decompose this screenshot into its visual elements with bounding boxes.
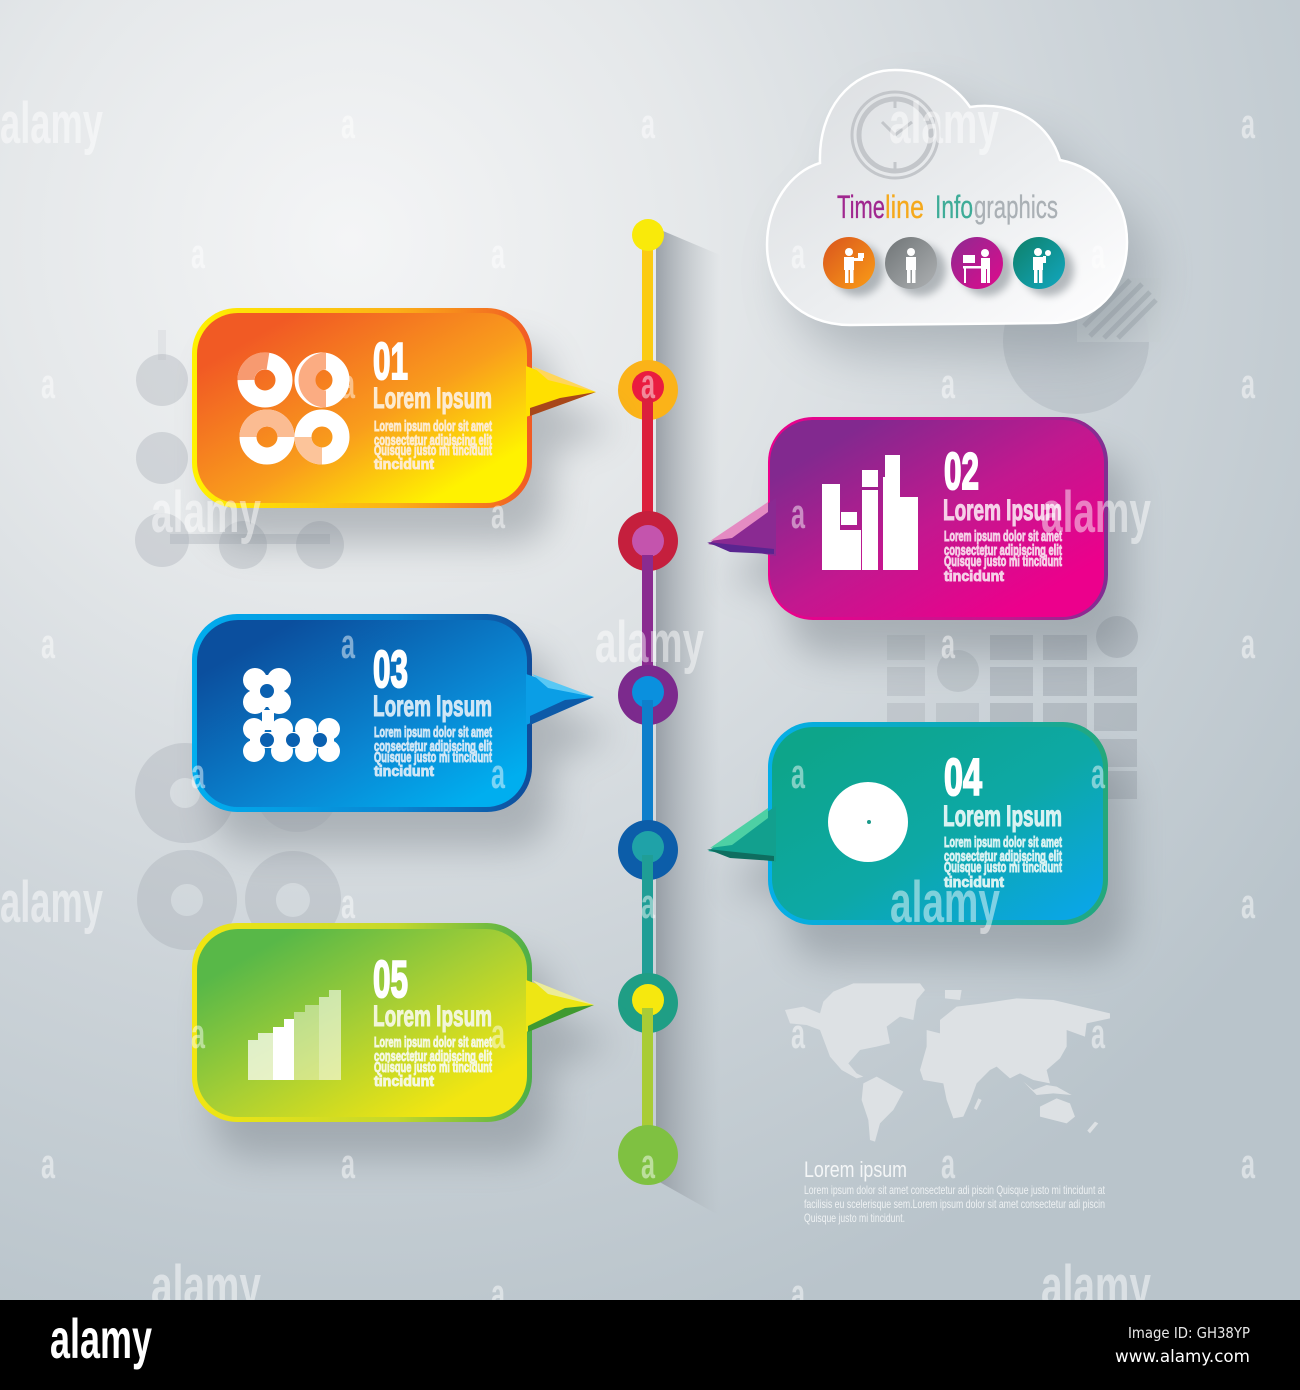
- text block: Quisque justo mi tincidunt: [374, 749, 492, 766]
- node 5: [618, 973, 678, 1034]
- text block: consectetur adipiscing elit: [374, 432, 492, 449]
- footer bar: [0, 1300, 1300, 1390]
- number: 04: [944, 749, 982, 807]
- title: [837, 189, 1058, 225]
- watermarks: a: [491, 230, 505, 277]
- text block: consectetur adipiscing elit: [944, 848, 1062, 865]
- watermarks: a: [341, 620, 355, 667]
- watermarks: a: [791, 750, 805, 797]
- watermarks: a: [791, 230, 805, 277]
- icon: gears: [246, 361, 341, 456]
- watermarks: alamy: [1041, 1254, 1151, 1319]
- watermarks: alamy: [890, 870, 1000, 935]
- text block: Lorem ipsum dolor sit amet: [374, 1034, 492, 1051]
- panel: bubble 03: [192, 614, 614, 848]
- watermarks: a: [491, 750, 505, 797]
- pointer: [707, 806, 776, 862]
- icon: person with tablet: [823, 237, 884, 296]
- text block: [374, 418, 492, 473]
- decorative pie and stripes: [1003, 268, 1161, 414]
- text block: Quisque justo mi tincidunt: [374, 1059, 492, 1076]
- text block: [944, 834, 1062, 891]
- panel: cloud title: [767, 70, 1149, 355]
- watermarks: a: [641, 360, 655, 407]
- text block: Lorem ipsum dolor sit amet: [944, 528, 1062, 545]
- node 3: [618, 665, 678, 726]
- watermarks: a: [491, 1010, 505, 1057]
- caption body: Quisque justo mi tincidunt.: [804, 1211, 905, 1225]
- watermarks: a: [1241, 620, 1255, 667]
- caption heading: Lorem ipsum: [804, 1157, 907, 1182]
- heading: Lorem Ipsum: [373, 690, 492, 723]
- text block: Lorem ipsum dolor sit amet: [374, 724, 492, 741]
- text block: Lorem ipsum dolor sit amet: [374, 418, 492, 435]
- end node: [618, 1125, 678, 1185]
- text block: tincidunt: [374, 456, 434, 473]
- watermarks: alamy: [151, 1254, 261, 1319]
- watermarks: a: [191, 1010, 205, 1057]
- panel: bubble 01: [192, 308, 616, 544]
- text block: Lorem ipsum dolor sit amet: [944, 834, 1062, 851]
- start node: [632, 219, 664, 251]
- icon: person at desk: [951, 237, 1012, 296]
- watermarks: a: [191, 230, 205, 277]
- heading: Lorem Ipsum: [373, 1000, 492, 1033]
- number: 01: [373, 333, 408, 391]
- text block: tincidunt: [944, 874, 1004, 891]
- watermarks: a: [191, 750, 205, 797]
- title: Info: [935, 189, 973, 225]
- caption body: facilisis eu scelerisque sem.Lorem ipsum dolor sit amet consectetur adi piscin: [804, 1197, 1105, 1211]
- watermarks: a: [491, 1270, 505, 1317]
- watermarks: a: [641, 100, 655, 147]
- heading: Lorem Ipsum: [943, 800, 1062, 833]
- footer logo: alamy: [50, 1307, 152, 1370]
- watermarks: a: [641, 880, 655, 927]
- watermarks: a: [1241, 880, 1255, 927]
- text block: tincidunt: [944, 568, 1004, 585]
- icon: rising bars: [248, 990, 341, 1080]
- watermarks: a: [791, 490, 805, 537]
- text block: tincidunt: [374, 1073, 434, 1090]
- website: www.alamy.com: [1115, 1347, 1250, 1367]
- icon: person with bulb: [1013, 237, 1074, 296]
- decorative grey gears left: [135, 330, 344, 950]
- number: 02: [944, 443, 979, 501]
- text block: Quisque justo mi tincidunt: [944, 553, 1062, 570]
- icon: gears: [243, 668, 340, 762]
- text block: [944, 528, 1062, 585]
- watermarks: alamy: [595, 610, 704, 675]
- panel: bubble 02: [707, 417, 1128, 656]
- text block: consectetur adipiscing elit: [374, 1048, 492, 1065]
- watermarks: a: [1241, 100, 1255, 147]
- heading: Lorem Ipsum: [373, 382, 492, 415]
- caption: [804, 1157, 1105, 1225]
- heading: Lorem Ipsum: [943, 494, 1062, 527]
- text block: Quisque justo mi tincidunt: [374, 442, 492, 459]
- node 2: [618, 511, 678, 575]
- watermarks: a: [41, 360, 55, 407]
- watermarks: alamy: [0, 870, 103, 935]
- pointer: [526, 980, 594, 1032]
- pointer: [526, 366, 596, 417]
- watermarks: a: [1091, 750, 1105, 797]
- icon: person on phone: [885, 237, 946, 296]
- watermarks: a: [941, 620, 955, 667]
- watermarks: a: [941, 1140, 955, 1187]
- icon: bar chart buildings: [822, 455, 918, 570]
- watermarks: a: [1091, 230, 1105, 277]
- icon: clock: [852, 92, 938, 178]
- panel: bubble 05: [192, 923, 614, 1158]
- watermarks: a: [1241, 360, 1255, 407]
- watermarks: a: [941, 360, 955, 407]
- watermarks: a: [791, 1270, 805, 1317]
- watermarks: a: [41, 1140, 55, 1187]
- text block: [374, 724, 492, 780]
- title: graphics: [974, 189, 1058, 225]
- text block: tincidunt: [374, 763, 434, 780]
- number: 05: [373, 951, 408, 1009]
- watermarks: alamy: [0, 91, 103, 156]
- text block: Quisque justo mi tincidunt: [944, 859, 1062, 876]
- watermarks: a: [491, 490, 505, 537]
- watermarks: a: [1241, 1140, 1255, 1187]
- number: 03: [373, 641, 408, 699]
- pointer: [707, 498, 776, 556]
- text block: consectetur adipiscing elit: [374, 738, 492, 755]
- watermarks: a: [791, 1010, 805, 1057]
- watermarks: a: [641, 1140, 655, 1187]
- timeline: [618, 219, 678, 1185]
- caption body: Lorem ipsum dolor sit amet consectetur adi piscin Quisque justo mi tincidunt at: [804, 1183, 1105, 1197]
- text block: [374, 1034, 492, 1090]
- icon: disc: [828, 782, 908, 862]
- watermarks: a: [341, 100, 355, 147]
- watermarks: a: [41, 620, 55, 667]
- timeline long shadow: [656, 228, 720, 1216]
- title: line: [885, 189, 924, 225]
- watermarks: alamy: [151, 480, 261, 545]
- node 1: [618, 360, 678, 425]
- decorative calendar grid: [887, 616, 1138, 799]
- watermarks: a: [1091, 1010, 1105, 1057]
- watermarks: a: [341, 1140, 355, 1187]
- watermarks: a: [341, 880, 355, 927]
- watermarks: alamy: [889, 91, 999, 156]
- title: Time: [837, 189, 885, 225]
- image id: Image ID: GH38YP: [1128, 1324, 1250, 1342]
- caption body: [804, 1183, 1105, 1225]
- text block: consectetur adipiscing elit: [944, 542, 1062, 559]
- pointer: [526, 674, 594, 725]
- watermarks: a: [341, 360, 355, 407]
- watermarks: alamy: [1041, 480, 1151, 545]
- node 4: [618, 820, 678, 881]
- panel: bubble 04: [707, 722, 1128, 961]
- world map: [785, 983, 1110, 1142]
- line segments: [642, 235, 653, 1155]
